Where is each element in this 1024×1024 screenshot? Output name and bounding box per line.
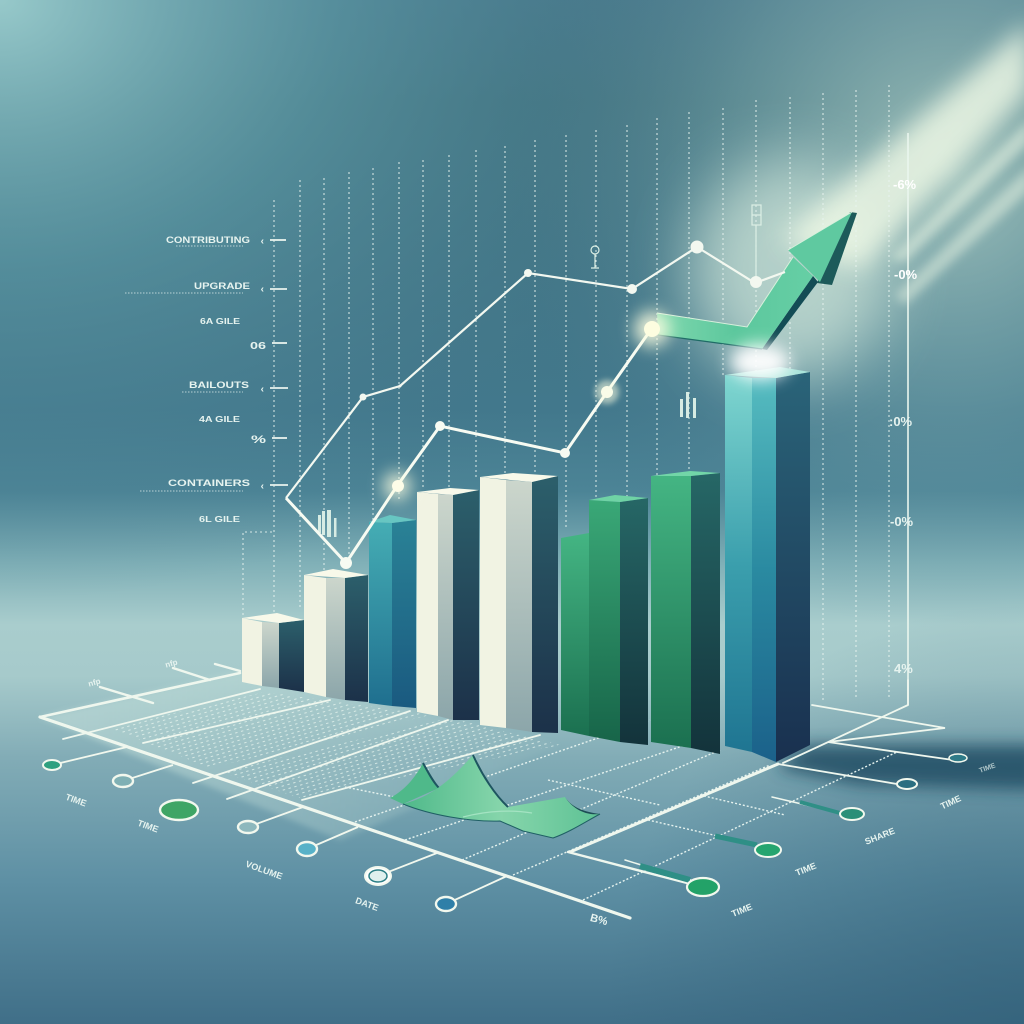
- floor labels left: VOLUME: [244, 859, 284, 881]
- bar 3: [369, 515, 416, 708]
- left axis ticks and labels: CONTAINERS: [168, 478, 250, 489]
- left axis ticks and labels: [125, 235, 288, 524]
- bar 1: [242, 613, 304, 692]
- floor pins: [43, 747, 967, 911]
- floor labels left: TIME: [64, 792, 88, 809]
- dashed vertical gridlines: [243, 85, 889, 700]
- bar 8: tallest: [725, 367, 810, 762]
- left axis ticks and labels: ‹: [261, 481, 264, 492]
- left axis ticks and labels: ‹: [261, 236, 264, 247]
- left axis ticks and labels: UPGRADE: [194, 281, 250, 292]
- left axis ticks and labels: ‹: [261, 284, 264, 295]
- right axis with percentage labels: -6%: [893, 177, 917, 192]
- white line series lower: [286, 328, 652, 569]
- left axis ticks and labels: BAILOUTS: [189, 380, 249, 391]
- green arrow rising: [657, 212, 857, 350]
- white line series upper: [286, 240, 785, 498]
- right axis with percentage labels: [889, 133, 918, 705]
- bar 7: [651, 471, 720, 754]
- floor labels left: TIME: [136, 818, 160, 835]
- left axis ticks and labels: 6A GILE: [200, 316, 240, 326]
- left axis ticks and labels: 06: [250, 341, 267, 352]
- floor labels left: [64, 658, 609, 928]
- floor labels right: TIME: [939, 793, 963, 811]
- floor labels right: TIME: [730, 902, 754, 919]
- bar 5: [480, 473, 558, 733]
- floor labels right: [730, 762, 997, 919]
- floor labels left: B%: [589, 912, 609, 928]
- floor labels right: TIME: [978, 762, 997, 775]
- floor grid: right axis: [568, 680, 953, 883]
- left axis ticks and labels: 4A GILE: [199, 414, 240, 424]
- glowing points: [383, 311, 790, 500]
- left axis ticks and labels: ‹: [261, 384, 264, 395]
- right axis with percentage labels: :0%: [889, 414, 913, 429]
- bar 2: [304, 569, 368, 702]
- light rays from top right: [780, 22, 1024, 305]
- floor labels right: TIME: [794, 861, 818, 878]
- floor labels left: DATE: [354, 895, 380, 913]
- green paper shape on floor: [390, 755, 600, 838]
- floor labels right: SHARE: [863, 826, 896, 847]
- small marker glyphs: [591, 205, 761, 280]
- floor labels left: nfp: [164, 658, 179, 670]
- bar 4: [417, 488, 479, 720]
- small bar icons: [318, 392, 696, 537]
- right axis with percentage labels: -0%: [894, 267, 918, 282]
- bar 6: [561, 495, 648, 745]
- floor shadow behind the tallest bar: [776, 745, 1024, 790]
- floor labels left: nfp: [87, 677, 102, 689]
- dotted floor lines: [345, 720, 897, 900]
- left axis ticks and labels: CONTRIBUTING: [166, 235, 250, 246]
- left axis ticks and labels: %: [251, 434, 266, 446]
- right axis with percentage labels: 4%: [894, 661, 913, 676]
- right axis with percentage labels: -0%: [890, 514, 914, 529]
- dotted floor texture: [110, 692, 560, 798]
- left axis ticks and labels: 6L GILE: [199, 514, 240, 524]
- light floor glow under bars: [40, 672, 560, 840]
- floor grid: left axis and parallels: [40, 664, 630, 918]
